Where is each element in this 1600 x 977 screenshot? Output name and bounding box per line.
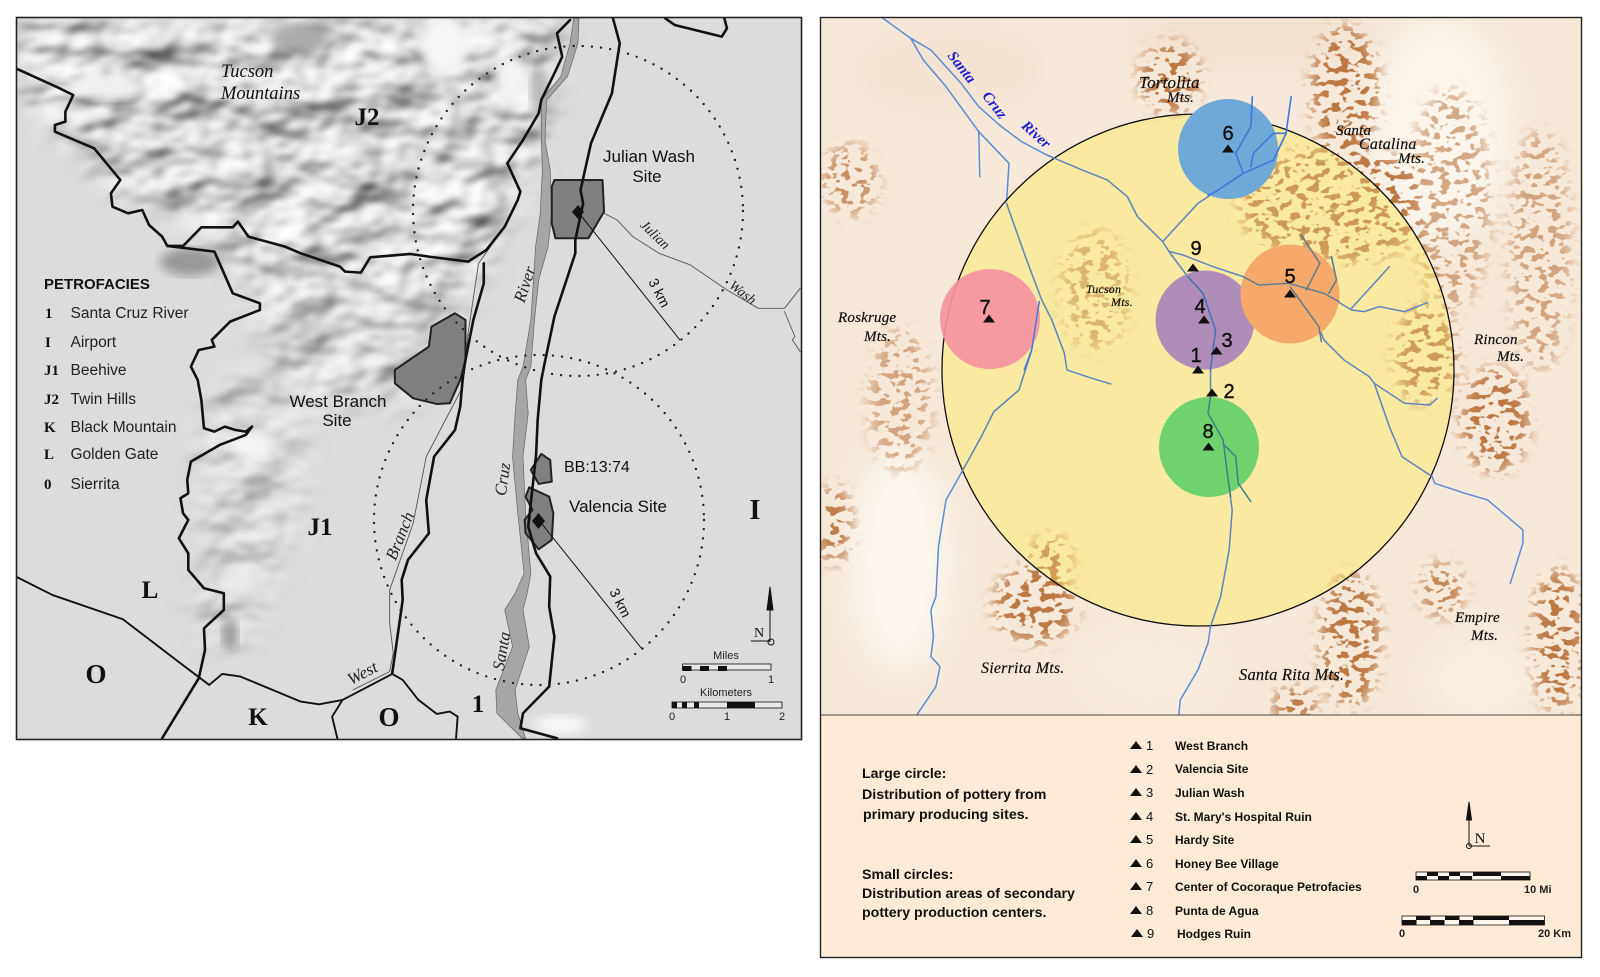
- petrofacies letter labels: O: [378, 702, 400, 732]
- site labels: BB:13:74: [564, 459, 630, 476]
- kilometers scale bar: 0: [1399, 928, 1405, 940]
- mountain range labels: Mts.: [1166, 90, 1194, 106]
- kilometers scale bar: [1399, 916, 1571, 940]
- map background: [16, 17, 801, 739]
- site labels: Site: [632, 167, 662, 186]
- circle 6: Honey Bee Village: [1178, 99, 1278, 199]
- site numerals: 2: [1223, 381, 1235, 403]
- petrofacies legend: L: [44, 447, 54, 463]
- mountain range labels: [837, 73, 1524, 684]
- petrofacies letter labels: O: [85, 659, 107, 689]
- radius labels: 3 km: [645, 276, 673, 310]
- radius labels: 3 km: [606, 586, 634, 620]
- site list: 5: [1146, 832, 1153, 847]
- mountain range labels: Rincon: [1473, 332, 1518, 348]
- scale bars: 1: [768, 674, 774, 686]
- north arrow: N: [754, 626, 764, 641]
- mountain label: Mountains: [220, 84, 300, 104]
- panel: pottery distribution map: [820, 17, 1581, 720]
- site list: St. Mary's Hospital Ruin: [1175, 810, 1312, 824]
- site numerals: 5: [1284, 266, 1296, 288]
- site list: 9: [1147, 926, 1154, 941]
- site labels: Julian Wash: [603, 147, 695, 166]
- mountain range labels: Mts.: [863, 329, 891, 345]
- scale bars: [669, 650, 785, 723]
- site list: 6: [1146, 856, 1153, 871]
- site numerals: 9: [1190, 238, 1202, 260]
- golden speckles inside large circle: [820, 17, 1581, 715]
- mountain range labels: Mts.: [1470, 628, 1498, 644]
- site list: West Branch: [1175, 739, 1248, 753]
- river and wash labels: River: [510, 263, 540, 306]
- circle 8: Punta de Agua: [1159, 397, 1259, 497]
- site labels: [289, 147, 695, 516]
- petrofacies letter labels: J2: [354, 104, 380, 131]
- miles scale bar: 0: [1413, 884, 1419, 896]
- river and wash labels: Branch: [382, 509, 418, 563]
- circle explanation text: Distribution areas of secondary: [862, 886, 1075, 902]
- site labels: Valencia Site: [569, 497, 667, 516]
- scale bars: 1: [724, 711, 730, 723]
- panel: legend: [820, 715, 1581, 957]
- miles scale bar: 10 Mi: [1524, 884, 1552, 896]
- rivers inside large circle: [961, 133, 1437, 627]
- site triangles: [983, 144, 1296, 450]
- petrofacies legend: Beehive: [70, 362, 127, 379]
- large distribution circle: [942, 114, 1454, 626]
- Santa Cruz River label: Cruz: [979, 89, 1010, 122]
- site numerals: [979, 123, 1296, 443]
- site list: [1130, 738, 1362, 941]
- mountain range labels: Roskruge: [837, 310, 896, 326]
- petrofacies legend: Santa Cruz River: [70, 305, 189, 322]
- river and wash labels: [344, 218, 759, 689]
- site labels: West Branch: [289, 392, 387, 411]
- site list: Valencia Site: [1175, 762, 1249, 776]
- petrofacies letter labels: J1: [308, 514, 332, 541]
- petrofacies legend: Twin Hills: [70, 391, 136, 408]
- north arrow: [751, 587, 774, 645]
- circle explanation text: Distribution of pottery from: [862, 787, 1046, 803]
- mountain range labels: Empire: [1454, 610, 1500, 626]
- mountain range labels: Mts.: [1397, 151, 1425, 167]
- petrofacies legend: 0: [44, 477, 52, 493]
- dotted radius circles: [374, 46, 743, 685]
- production site shapes: [395, 180, 604, 549]
- circle 4: St. Mary's: [1156, 270, 1254, 370]
- circle explanation text: primary producing sites.: [863, 807, 1029, 823]
- Santa Cruz River label: [948, 52, 1050, 147]
- site list: 1: [1146, 738, 1153, 753]
- site center markers: [532, 205, 584, 529]
- scale bars: Kilometers: [700, 687, 752, 699]
- hillshade terrain: [17, 18, 571, 654]
- petrofacies legend: Sierrita: [70, 476, 120, 493]
- 3 km radius lines: [539, 212, 680, 649]
- petrofacies legend: Airport: [70, 334, 117, 351]
- site numerals: 4: [1194, 296, 1206, 318]
- petrofacies legend: J1: [44, 363, 59, 379]
- site list: Honey Bee Village: [1175, 857, 1279, 871]
- petrofacies letter labels: L: [142, 577, 158, 604]
- scale bars: 2: [779, 711, 785, 723]
- circle explanation text: pottery production centers.: [862, 905, 1046, 921]
- radius labels: [610, 278, 668, 618]
- petrofacies letter labels: I: [750, 495, 760, 526]
- large circle outline: [942, 114, 1454, 626]
- petrofacies letter labels: K: [248, 704, 268, 731]
- kilometers scale bar: 20 Km: [1538, 928, 1571, 940]
- site list: Hardy Site: [1175, 833, 1235, 847]
- site list: 8: [1146, 903, 1153, 918]
- site list: Punta de Agua: [1175, 904, 1259, 918]
- mountain label: Tucson: [221, 62, 273, 82]
- mountain range labels: Catalina: [1359, 136, 1417, 153]
- site list: 2: [1146, 762, 1153, 777]
- rivers over small circles: [1024, 97, 1339, 502]
- mountain label: [220, 64, 300, 99]
- mountain range labels: Mts.: [1110, 295, 1133, 309]
- mountain range labels: Mts.: [1496, 349, 1524, 365]
- Santa Cruz River label: Santa: [944, 48, 979, 87]
- site list: Julian Wash: [1175, 786, 1245, 800]
- site numerals: 1: [1190, 345, 1202, 367]
- site list: 7: [1146, 879, 1153, 894]
- site numerals: 3: [1221, 330, 1233, 352]
- petrofacies legend: PETROFACIES: [44, 276, 150, 293]
- circle 5: Hardy: [1240, 244, 1340, 344]
- petrofacies legend: Black Mountain: [70, 419, 176, 436]
- mountain range labels: Tortolita: [1139, 73, 1200, 92]
- petrofacies legend: [44, 276, 189, 493]
- north arrow: N: [1475, 831, 1486, 847]
- circle explanation text: Large circle:: [862, 766, 946, 782]
- secondary production circles: [940, 99, 1340, 497]
- petrofacies legend: J2: [44, 392, 59, 408]
- mountain range labels: Sierrita Mts.: [981, 660, 1064, 677]
- panel: petrofacies map: [16, 15, 801, 739]
- river and wash labels: West: [344, 657, 382, 689]
- river and wash labels: Julian: [637, 218, 672, 253]
- site numerals: 7: [979, 297, 991, 319]
- site list: 3: [1146, 785, 1153, 800]
- site list: 4: [1146, 809, 1153, 824]
- petrofacies legend: Golden Gate: [70, 446, 158, 463]
- river and wash labels: Cruz: [491, 461, 514, 497]
- petrofacies legend: 1: [45, 306, 52, 322]
- brown mountain speckles: [820, 17, 1581, 715]
- terrain highlights and shadows: [76, 15, 586, 735]
- rivers outside circles: [883, 18, 1523, 715]
- light terrain bands: [850, 20, 1530, 720]
- Santa Cruz River channel: [16, 18, 800, 738]
- mountain range labels: Santa Rita Mts.: [1239, 665, 1344, 684]
- scale bars: Miles: [713, 650, 739, 662]
- petrofacies legend: I: [45, 335, 51, 351]
- Santa Cruz River label: River: [1017, 117, 1054, 152]
- site labels: Site: [322, 411, 352, 430]
- petrofacies letter labels: [85, 104, 760, 732]
- river and wash labels: Wash: [726, 278, 759, 308]
- circle 7: Cocoraque: [940, 269, 1040, 369]
- mountain range labels: Tucson: [1086, 282, 1121, 296]
- desert base map: [820, 17, 1581, 715]
- scale bars: 0: [669, 711, 675, 723]
- petrofacies legend: K: [44, 420, 56, 436]
- circle explanation text: [862, 766, 1075, 921]
- scale bars: 0: [680, 674, 686, 686]
- north arrow: [1466, 802, 1490, 848]
- petrofacies boundaries: [16, 18, 727, 738]
- site list: Center of Cocoraque Petrofacies: [1175, 880, 1362, 894]
- thin washes: [353, 213, 800, 690]
- miles scale bar: [1413, 872, 1552, 896]
- river and wash labels: Santa: [489, 630, 514, 672]
- site numerals: 8: [1202, 421, 1214, 443]
- mountain range labels: Santa: [1336, 123, 1371, 139]
- site numerals: 6: [1222, 123, 1234, 145]
- circle explanation text: Small circles:: [862, 867, 954, 883]
- site list: Hodges Ruin: [1177, 927, 1251, 941]
- petrofacies letter labels: 1: [472, 691, 484, 718]
